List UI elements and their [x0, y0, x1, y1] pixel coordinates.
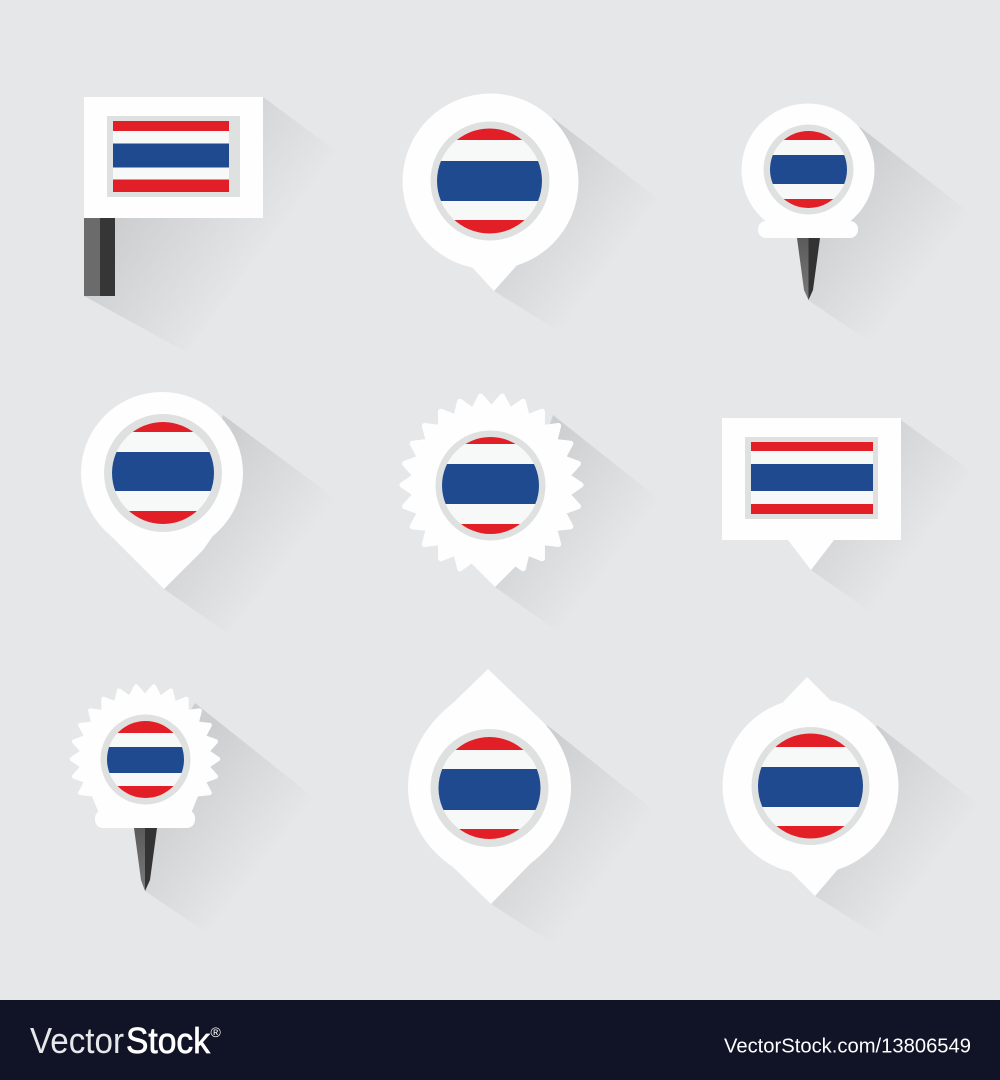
long shadow: starburst pin — [145, 703, 313, 933]
pin needle — [134, 828, 157, 891]
flag ring — [436, 430, 546, 540]
long shadow: starburst pointer — [495, 415, 660, 631]
icon: rectangular speech-bubble pointer — [722, 418, 972, 613]
round Thai flag — [435, 737, 543, 839]
starburst body — [402, 396, 581, 569]
VectorStock logo: Stock — [126, 1020, 211, 1061]
long shadow: diamond pointer — [491, 725, 657, 950]
starburst head — [72, 687, 218, 812]
pin needle — [797, 238, 820, 300]
icon: teardrop map pointer — [81, 392, 304, 614]
flag ring — [104, 414, 222, 532]
flag ring — [430, 729, 548, 847]
round Thai flag — [440, 437, 542, 534]
flag ring — [100, 714, 190, 804]
registered mark: ® — [210, 1024, 222, 1040]
round Thai flag — [437, 128, 542, 234]
pin head — [742, 104, 874, 236]
pin base — [758, 221, 858, 238]
pointer body — [81, 392, 243, 589]
round Thai flag — [103, 721, 188, 798]
long shadow: round map pointer — [494, 118, 657, 332]
icon: starburst map pointer — [400, 394, 628, 610]
long shadow: flag on pole — [84, 97, 336, 352]
round Thai flag — [755, 733, 867, 839]
long shadow: two-tip pointer — [815, 725, 977, 937]
pointer body — [722, 677, 898, 896]
long shadow: round push pin — [808, 127, 970, 342]
image URL: VectorStock.com/13806549 — [724, 1034, 971, 1058]
icon: circular pointer with top and bottom tips — [722, 677, 948, 916]
long shadow: teardrop pointer — [164, 415, 337, 633]
pointer body — [408, 669, 571, 904]
flag ring — [752, 727, 870, 845]
pointer tip — [472, 552, 516, 587]
icon: rectangular flag on a pole — [84, 97, 336, 352]
Thai flag stripes — [751, 442, 873, 514]
pin base — [95, 810, 195, 828]
flag ring — [764, 124, 854, 214]
flag frame — [107, 116, 240, 197]
flag panel — [84, 97, 263, 218]
long shadow: rectangular pointer — [811, 420, 972, 613]
VectorStock logo: Vector — [30, 1020, 124, 1061]
icon: double-pointed diamond pointer — [408, 669, 622, 922]
pole — [84, 218, 115, 296]
VectorStock logo — [30, 1020, 211, 1061]
icon: round push pin — [742, 104, 940, 320]
round Thai flag — [112, 422, 214, 524]
footer bar — [0, 1000, 1000, 1080]
round Thai flag — [770, 131, 847, 208]
Thai flag stripes — [113, 121, 229, 192]
pointer body — [402, 94, 578, 291]
icon: starburst push pin — [70, 684, 284, 912]
flag ring — [430, 122, 550, 240]
icon: round map pointer — [402, 94, 628, 310]
flag frame — [745, 437, 878, 519]
pointer panel — [722, 418, 901, 570]
